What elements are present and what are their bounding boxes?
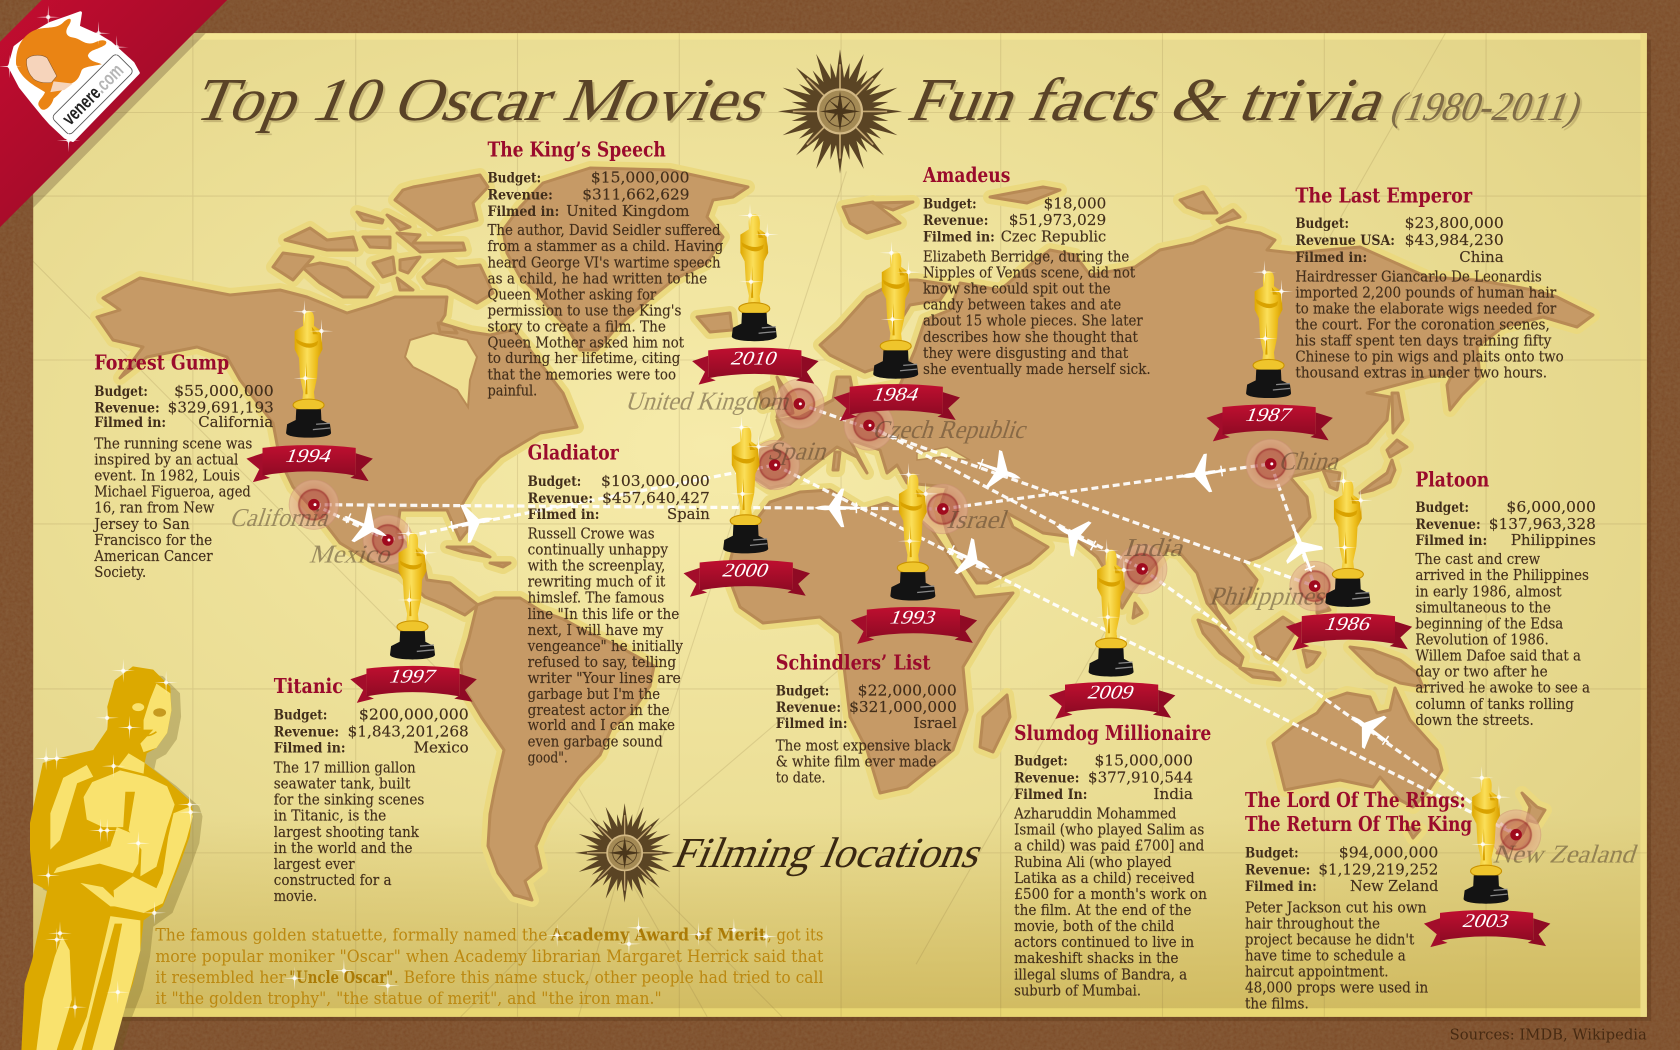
panel: Platoon: arrived in the Philippines <box>1415 566 1589 584</box>
panel: The King's Speech: story to create a film. The <box>487 318 666 336</box>
panel: Forrest Gump: $329,691,193 <box>168 399 274 417</box>
location labels <box>227 386 1642 868</box>
panel: Titanic: seawater tank, built <box>274 775 410 793</box>
panel: Titanic <box>274 674 469 905</box>
panel: Gladiator: Gladiator <box>528 441 619 465</box>
panel: The Lord Of The Rings: Budget: <box>1245 846 1299 862</box>
panel: Amadeus: Amadeus <box>922 163 1010 187</box>
statue: 1997: 1997 <box>386 666 439 687</box>
panel: The Lord Of The Rings <box>1245 788 1472 1013</box>
statue: 2009: 2009 <box>1085 682 1137 703</box>
panel: Gladiator: Russell Crowe was <box>528 524 655 542</box>
panel: The Lord Of The Rings: Revenue: <box>1245 862 1310 878</box>
panel: The Last Emperor: China <box>1459 248 1504 266</box>
panel: The King's Speech: The King’s Speech <box>487 137 666 161</box>
panel: Schindlers' List: Filmed in: <box>776 716 847 732</box>
title: (1980-2011) <box>1385 85 1589 130</box>
panel: Gladiator: $103,000,000 <box>601 472 710 490</box>
panel: Slumdog Millionaire: India <box>1153 785 1193 803</box>
panel: Forrest Gump: Society. <box>94 563 146 581</box>
panel: Slumdog Millionaire: a child) was paid £700] and <box>1014 837 1205 855</box>
panel: Titanic: $1,843,201,268 <box>348 723 469 741</box>
panel: Gladiator: $457,640,427 <box>602 489 710 507</box>
location labels: Mexico <box>307 539 397 568</box>
panel: The Lord Of The Rings: the films. <box>1245 995 1309 1013</box>
statue: 2000: 2000 <box>719 560 772 581</box>
flight routes <box>314 404 1516 835</box>
panel: The Lord Of The Rings: The Return Of The King <box>1245 812 1472 836</box>
panel: Slumdog Millionaire: Revenue: <box>1014 771 1079 787</box>
panel: Platoon <box>1415 467 1596 729</box>
panel: Platoon: Filmed in: <box>1415 533 1487 549</box>
panel: Forrest Gump: Budget: <box>94 384 148 400</box>
statue: 1993: 1993 <box>886 607 939 628</box>
text: oscar history: . Before this name stuck, other people had tried to call <box>394 968 823 988</box>
panel: Amadeus <box>922 163 1151 378</box>
panel: Forrest Gump: Revenue: <box>94 400 160 416</box>
panel: Titanic: Titanic <box>274 674 343 698</box>
panel: Amadeus: Revenue: <box>923 213 988 229</box>
statue: 2003: 2003 <box>1460 910 1512 932</box>
panel: Gladiator: even garbage sound <box>528 732 663 750</box>
title: Fun facts & trivia <box>900 65 1399 133</box>
statue: 2000 <box>684 416 810 597</box>
panel: Platoon: Revenue: <box>1415 517 1481 533</box>
panel: Amadeus: Filmed in: <box>923 230 995 246</box>
panel: Amadeus: about 15 whole pieces. She later <box>923 312 1143 330</box>
panel: The King's Speech: Filmed in: <box>487 204 559 220</box>
panel: The Lord Of The Rings: hair throughout the <box>1245 914 1380 932</box>
panel: Amadeus: they were disgusting and that <box>923 344 1128 362</box>
panel: The King's Speech: Queen Mother asking for <box>487 285 657 303</box>
panel: Slumdog Millionaire: Rubina Ali (who played <box>1014 853 1172 871</box>
panel: The King's Speech: The author, David Seidler suffered <box>487 221 721 239</box>
panel: Titanic: in Titanic, is the <box>274 807 386 825</box>
panel: Platoon: column of tanks rolling <box>1415 695 1574 713</box>
panel: Slumdog Millionaire: Filmed In: <box>1014 787 1088 803</box>
panel: Gladiator: Filmed in: <box>528 507 599 523</box>
panel: The King's Speech <box>487 137 723 399</box>
logo: venere.com: .com <box>90 60 128 98</box>
panel: Slumdog Millionaire: Slumdog Millionaire <box>1014 721 1211 745</box>
panel: The King's Speech: to during her lifetime, citing <box>487 349 681 367</box>
panel: Slumdog Millionaire: Azharuddin Mohammed <box>1013 805 1177 823</box>
panel: The Last Emperor: imported 2,200 pounds of human hair <box>1295 283 1557 301</box>
location labels: China <box>1276 446 1345 475</box>
panel: Gladiator: Budget: <box>528 474 581 490</box>
panel: Gladiator: next, I will have my <box>528 621 664 639</box>
statue: 1984: 1984 <box>869 384 922 406</box>
location markers <box>289 379 1541 860</box>
panel: The Lord Of The Rings: Peter Jackson cut his own <box>1245 898 1427 916</box>
panel: Gladiator: continually unhappy <box>528 540 668 558</box>
panel: Amadeus: know she could spit out the <box>923 280 1111 298</box>
panel: Forrest Gump: Jersey to San <box>92 515 190 533</box>
panel: Slumdog Millionaire <box>1013 721 1211 999</box>
panel: Titanic: for the sinking scenes <box>274 791 424 809</box>
statue: 1994: 1994 <box>282 445 335 467</box>
panel: The Last Emperor: Filmed in: <box>1295 250 1367 266</box>
panel: Titanic: movie. <box>274 887 317 905</box>
statue: 1993 <box>851 463 977 644</box>
panel: Schindlers' List: Israel <box>913 714 957 732</box>
panel: Gladiator: garbage but I'm the <box>528 685 660 703</box>
panel: Titanic: The 17 million gallon <box>274 759 416 777</box>
text: oscar history: it "the golden trophy", "the statue of merit", and "the iron man." <box>155 989 662 1009</box>
title <box>185 65 1589 133</box>
panel: The Lord Of The Rings: project because he didn't <box>1245 930 1414 948</box>
panel: The Lord Of The Rings: $1,129,219,252 <box>1318 860 1438 878</box>
title: Top 10 Oscar Movies <box>185 65 781 133</box>
panel: Platoon: down the streets. <box>1415 711 1534 729</box>
statue: 1994 <box>246 300 373 482</box>
panel: The Lord Of The Rings: have time to schedule a <box>1245 947 1406 965</box>
panel: Gladiator: rewriting much of it <box>528 573 665 591</box>
panel: Platoon: in early 1986, almost <box>1415 582 1562 600</box>
panel: Gladiator: Spain <box>667 505 710 523</box>
panel: Amadeus: $18,000 <box>1044 194 1106 212</box>
panel: Gladiator: himslef. The famous <box>528 589 664 607</box>
panel: Forrest Gump: The running scene was <box>94 434 252 452</box>
panel: Amadeus: Czec Republic <box>1001 228 1106 246</box>
panel: The Last Emperor: to make the elaborate wigs needed for <box>1295 299 1557 317</box>
world map <box>97 168 1593 900</box>
panel: The Lord Of The Rings: haircut appointment. <box>1245 963 1389 981</box>
panel: Platoon: simultaneous to the <box>1415 598 1551 616</box>
statue: 1984 <box>834 241 960 421</box>
panel: Schindlers' List: Budget: <box>776 683 829 699</box>
panel: The King's Speech: Queen Mother asked him not <box>487 334 684 352</box>
icon: compass rose <box>778 49 902 174</box>
panel: Forrest Gump: Filmed in: <box>94 415 166 431</box>
panel: Schindlers' List: to date. <box>776 769 826 787</box>
location labels: New Zealand <box>1491 839 1642 868</box>
text: oscar history: , got its <box>767 926 823 946</box>
statue: 2010: 2010 <box>728 348 781 369</box>
panel: Slumdog Millionaire: $377,910,544 <box>1088 769 1193 787</box>
panel: The Last Emperor <box>1295 184 1564 382</box>
panel: The Last Emperor: Hairdresser Giancarlo De Leonardis <box>1295 267 1542 285</box>
statue: 2003 <box>1424 766 1550 947</box>
panel: Forrest Gump <box>92 351 274 581</box>
panel: Forrest Gump: event. In 1982, Louis <box>94 467 240 485</box>
panel: Amadeus: $51,973,029 <box>1009 211 1106 229</box>
panel: Amadeus: Elizabeth Berridge, during the <box>923 247 1129 265</box>
panel: Platoon: Budget: <box>1415 500 1469 516</box>
panel: Slumdog Millionaire: Ismail (who played Salim as <box>1014 821 1204 839</box>
panel: Forrest Gump: California <box>198 413 273 431</box>
panel: Platoon: Philippines <box>1511 531 1596 549</box>
panel: Schindlers' List: & white film ever made <box>776 753 936 771</box>
panel: Gladiator: line "In this life or the <box>528 605 679 623</box>
panel: Forrest Gump: Francisco for the <box>94 531 212 549</box>
panel: Gladiator: vengeance" he initially <box>527 637 683 655</box>
panel: Platoon: Willem Dafoe said that a <box>1415 647 1581 665</box>
text: oscar history: more popular moniker "Oscar" when Academy librarian Margaret Herrick said that <box>155 947 823 967</box>
panel: The King's Speech: painful. <box>487 381 537 399</box>
panel: The Lord Of The Rings: Filmed in: <box>1245 879 1317 895</box>
statue: 1986 <box>1286 469 1412 650</box>
panel: Gladiator: good". <box>528 748 568 766</box>
panel: Platoon: Platoon <box>1415 467 1489 491</box>
panel: Platoon: day or two after he <box>1415 663 1548 681</box>
heading: filming locations: Filming locations <box>667 828 992 876</box>
panel: The Lord Of The Rings: $94,000,000 <box>1339 844 1438 862</box>
panel: The King's Speech: heard George VI's wartime speech <box>487 253 721 271</box>
panel: Titanic: largest shooting tank <box>274 823 420 841</box>
panel: The Last Emperor: $23,800,000 <box>1405 214 1504 232</box>
text: oscar history: The famous golden statuette, formally named the <box>155 926 548 946</box>
panel: The King's Speech: as a child, he had written to the <box>487 269 707 287</box>
text: oscar history: it resembled her <box>155 968 287 988</box>
panel: The Last Emperor: $43,984,230 <box>1405 231 1504 249</box>
panel: The Last Emperor: thousand extras in under two hours. <box>1295 364 1547 382</box>
panel: The King's Speech: $311,662,629 <box>582 185 689 203</box>
panel: Platoon: $6,000,000 <box>1506 498 1596 516</box>
text: sources: Sources: IMDB, Wikipedia <box>1450 1025 1647 1043</box>
panel: The Last Emperor: his staff spent ten days training fifty <box>1295 332 1552 350</box>
panel: Forrest Gump: Forrest Gump <box>94 351 229 375</box>
panel: Amadeus: candy between takes and ate <box>923 296 1121 314</box>
location labels: California <box>227 503 335 532</box>
panel: Schindlers' List: Revenue: <box>776 700 841 716</box>
panel: Slumdog Millionaire: actors continued to live in <box>1014 933 1194 951</box>
panel: Titanic: largest ever <box>274 855 355 873</box>
panel: Titanic: Mexico <box>414 739 469 757</box>
panel: The King's Speech: Revenue: <box>487 187 553 203</box>
panel: Forrest Gump: 16, ran from New <box>94 499 214 517</box>
panel: Gladiator <box>527 441 710 766</box>
panel: Titanic: constructed for a <box>274 871 392 889</box>
panel: Forrest Gump: Michael Figueroa, aged <box>94 483 251 501</box>
panel: Platoon: beginning of the Edsa <box>1415 614 1563 632</box>
location labels: India <box>1121 533 1190 562</box>
panel: Titanic: Filmed in: <box>274 741 346 757</box>
panel: Gladiator: greatest actor in the <box>528 701 670 719</box>
panel: Titanic: Revenue: <box>274 725 339 741</box>
panel: Slumdog Millionaire: the film. At the end of the <box>1014 901 1191 919</box>
panel: Slumdog Millionaire: makeshift shacks in the <box>1014 949 1179 967</box>
statue: 1997 <box>350 522 477 703</box>
statue: 1987 <box>1206 260 1333 441</box>
panel: The King's Speech: United Kingdom <box>566 202 689 220</box>
location labels: Czech Republic <box>870 415 1032 444</box>
heading: filming locations <box>575 803 992 903</box>
panel: The King's Speech: that the memories were too <box>487 365 676 383</box>
panel: Gladiator: world and I can make <box>528 716 675 734</box>
panel: Schindlers' List: $22,000,000 <box>858 681 957 699</box>
panel: Titanic: $200,000,000 <box>359 705 469 723</box>
panel: Schindlers' List: The most expensive black <box>776 737 952 755</box>
statue: 1987: 1987 <box>1242 405 1295 426</box>
panel: Slumdog Millionaire: movie, both of the child <box>1014 917 1175 935</box>
logo: venere.com: venere <box>59 83 105 130</box>
location labels: United Kingdom <box>623 386 796 415</box>
panel: Slumdog Millionaire: suburb of Mumbai. <box>1014 981 1141 999</box>
panel: Platoon: The cast and crew <box>1415 550 1540 568</box>
panel: Slumdog Millionaire: illegal slums of Bandra, a <box>1014 965 1187 983</box>
panel: Gladiator: writer "Your lines are <box>528 669 681 687</box>
statue: 2010 <box>692 204 819 385</box>
panel: Amadeus: Nipples of Venus scene, did not <box>923 264 1135 282</box>
logo: venere.com <box>0 5 138 152</box>
panel: The Last Emperor: Budget: <box>1295 216 1349 232</box>
panel: Slumdog Millionaire: Budget: <box>1014 754 1068 770</box>
panel: The Last Emperor: The Last Emperor <box>1295 183 1472 207</box>
panel: The King's Speech: $15,000,000 <box>591 169 689 187</box>
panel: The King's Speech: permission to use the King's <box>487 302 682 320</box>
text: oscar history: Academy Award of Merit <box>550 926 766 946</box>
location labels: Spain <box>765 436 833 465</box>
panel: The Last Emperor: Chinese to pin wigs and plaits onto two <box>1295 348 1564 366</box>
panel: Schindlers' List <box>776 651 957 787</box>
panel: The Lord Of The Rings: 48,000 props were used in <box>1245 979 1428 997</box>
panel: Forrest Gump: American Cancer <box>93 547 213 565</box>
panel: Gladiator: Revenue: <box>528 491 593 507</box>
big oscar statue <box>21 659 202 1050</box>
statue: 2009 <box>1049 539 1175 719</box>
panel: Slumdog Millionaire: $15,000,000 <box>1094 752 1193 770</box>
panel: Schindlers' List: Schindlers’ List <box>776 651 931 675</box>
statue: 1986: 1986 <box>1321 614 1374 635</box>
panel: Slumdog Millionaire: Latika as a child) received <box>1014 869 1195 887</box>
planes <box>336 444 1400 759</box>
panel: Platoon: $137,963,328 <box>1489 515 1596 533</box>
panel: Amadeus: describes how she thought that <box>923 328 1138 346</box>
panel: Slumdog Millionaire: £500 for a month's work on <box>1014 885 1207 903</box>
panel: Forrest Gump: inspired by an actual <box>94 450 239 468</box>
panel: Schindlers' List: $321,000,000 <box>849 698 957 716</box>
text: oscar history <box>155 916 823 1009</box>
panel: The Lord Of The Rings: The Lord Of The Rings: <box>1245 788 1466 812</box>
panel: Amadeus: she eventually made herself sick. <box>923 360 1151 378</box>
panel: Gladiator: with the screenplay, <box>528 557 665 575</box>
corner ribbon <box>0 0 227 227</box>
panel: The King's Speech: Budget: <box>487 171 541 187</box>
location labels: Philippines <box>1207 581 1331 610</box>
panel: The Last Emperor: Revenue USA: <box>1295 233 1395 249</box>
panel: Gladiator: refused to say, telling <box>528 653 676 671</box>
panel: Forrest Gump: $55,000,000 <box>174 382 274 400</box>
location labels: Israel <box>944 505 1013 534</box>
panel: Platoon: arrived he awoke to see a <box>1415 679 1590 697</box>
panel: Titanic: Budget: <box>274 707 327 723</box>
panel: Amadeus: Budget: <box>923 196 977 212</box>
text: oscar history: "Uncle Oscar" <box>289 968 393 988</box>
panel: Platoon: Revolution of 1986. <box>1415 630 1549 648</box>
panel: The Lord Of The Rings: New Zeland <box>1350 877 1439 895</box>
panel: The King's Speech: from a stammer as a child. Having <box>487 237 723 255</box>
panel: The Last Emperor: the court. For the coronation scenes, <box>1295 315 1550 333</box>
panel: Titanic: in the world and the <box>274 839 412 857</box>
